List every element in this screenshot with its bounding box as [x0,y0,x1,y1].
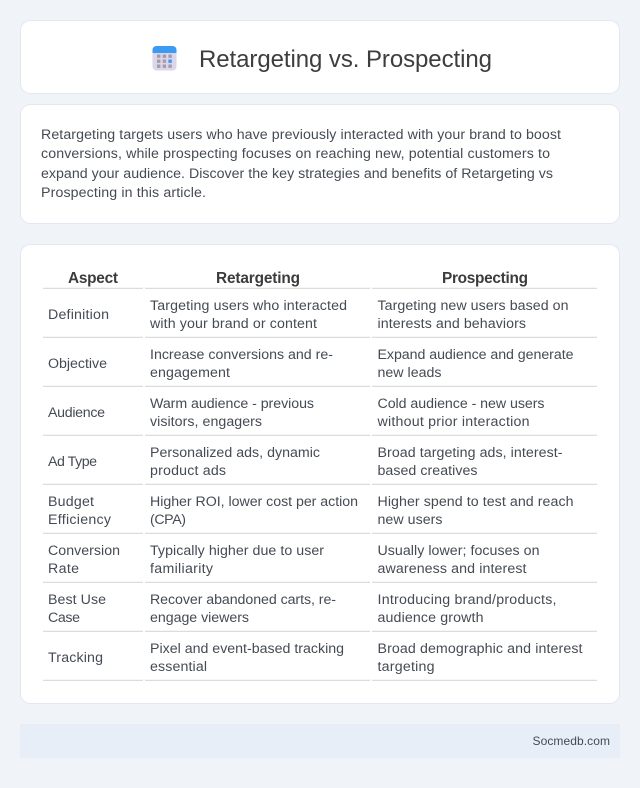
title: Retargeting vs. Prospecting [199,46,492,73]
row: Conversion Rate: familiarity [150,561,214,577]
row: Ad Type: Broad targeting ads, interest- [378,445,563,461]
text block: intro paragraph: conversions, while prospecting focuses on reaching new, potential customers to [41,146,550,162]
row: Objective: Expand audience and generate [378,347,574,363]
row: Definition: Targeting new users based on [378,298,568,314]
panel: title card [20,20,620,94]
row: Conversion Rate: awareness and interest [378,561,527,577]
row: Best Use Case [43,592,597,631]
text block: intro paragraph [41,127,561,201]
row: Tracking: Tracking [48,650,103,666]
row: Conversion Rate: Conversion [48,543,120,559]
row: Definition [43,298,597,337]
row: Best Use Case: engage viewers [150,610,249,626]
row: Audience: visitors, engagers [150,414,262,430]
row: Audience: Warm audience - previous [150,396,314,412]
row: Ad Type [43,445,597,484]
row: Budget Efficiency: Higher ROI, lower cost per action [150,494,358,510]
row: Ad Type: based creatives [378,463,478,479]
text block: intro paragraph: Retargeting targets users who have previously interacted with your brand to boost [41,127,561,143]
row: Budget Efficiency [43,494,597,533]
row: Definition: Definition [48,307,109,323]
row: Objective [43,347,597,386]
row: Objective: Increase conversions and re- [150,347,333,363]
row: Best Use Case: Introducing brand/products, [378,592,556,608]
icon: calendar [152,46,176,70]
row: Audience: Cold audience - new users [378,396,544,412]
row: Definition: Targeting users who interacted [150,298,347,314]
text block: intro paragraph: Prospecting in this article. [41,185,206,201]
row: Budget Efficiency: Budget [48,494,94,510]
row: Ad Type: Personalized ads, dynamic [150,445,320,461]
row: Objective: Objective [48,356,107,372]
row: Ad Type: Ad Type [48,454,97,470]
row: Conversion Rate [43,543,597,582]
panel: comparison table [20,244,620,704]
row: Audience: Audience [48,405,105,421]
footer text: Socmedb.com [532,734,610,748]
row: Tracking: targeting [378,659,434,675]
row: Budget Efficiency: Higher spend to test and reach [378,494,574,510]
row: Audience [43,396,597,435]
row: Objective: engagement [150,365,230,381]
row: Tracking: Broad demographic and interest [378,641,583,657]
row: Conversion Rate: Usually lower; focuses on [378,543,540,559]
table header: Retargeting [216,270,300,287]
row: Best Use Case: Case [48,610,80,626]
row: Best Use Case: Best Use [48,592,106,608]
table header: Aspect [68,270,118,287]
row: Tracking: Pixel and event-based tracking [150,641,344,657]
row: Budget Efficiency: (CPA) [150,512,186,528]
row: Best Use Case: audience growth [378,610,484,626]
table header: Prospecting [442,270,528,287]
row: Audience: without prior interaction [376,414,530,430]
row: Best Use Case: Recover abandoned carts, re- [150,592,336,608]
row: Tracking: essential [150,659,207,675]
table header [43,270,597,288]
row: Budget Efficiency: new users [378,512,442,528]
row: Definition: interests and behaviors [378,316,526,332]
panel: introduction [20,104,620,224]
footer [20,724,620,758]
row: Definition: with your brand or content [149,316,317,332]
row: Conversion Rate: Typically higher due to user [150,543,324,559]
row: Tracking [43,641,597,680]
row: Objective: new leads [378,365,442,381]
row: Budget Efficiency: Efficiency [48,512,112,528]
row: Conversion Rate: Rate [48,561,79,577]
text block: intro paragraph: expand your audience. Discover the key strategies and benefits of Retargeting vs [41,166,553,182]
row: Ad Type: product ads [150,463,226,479]
